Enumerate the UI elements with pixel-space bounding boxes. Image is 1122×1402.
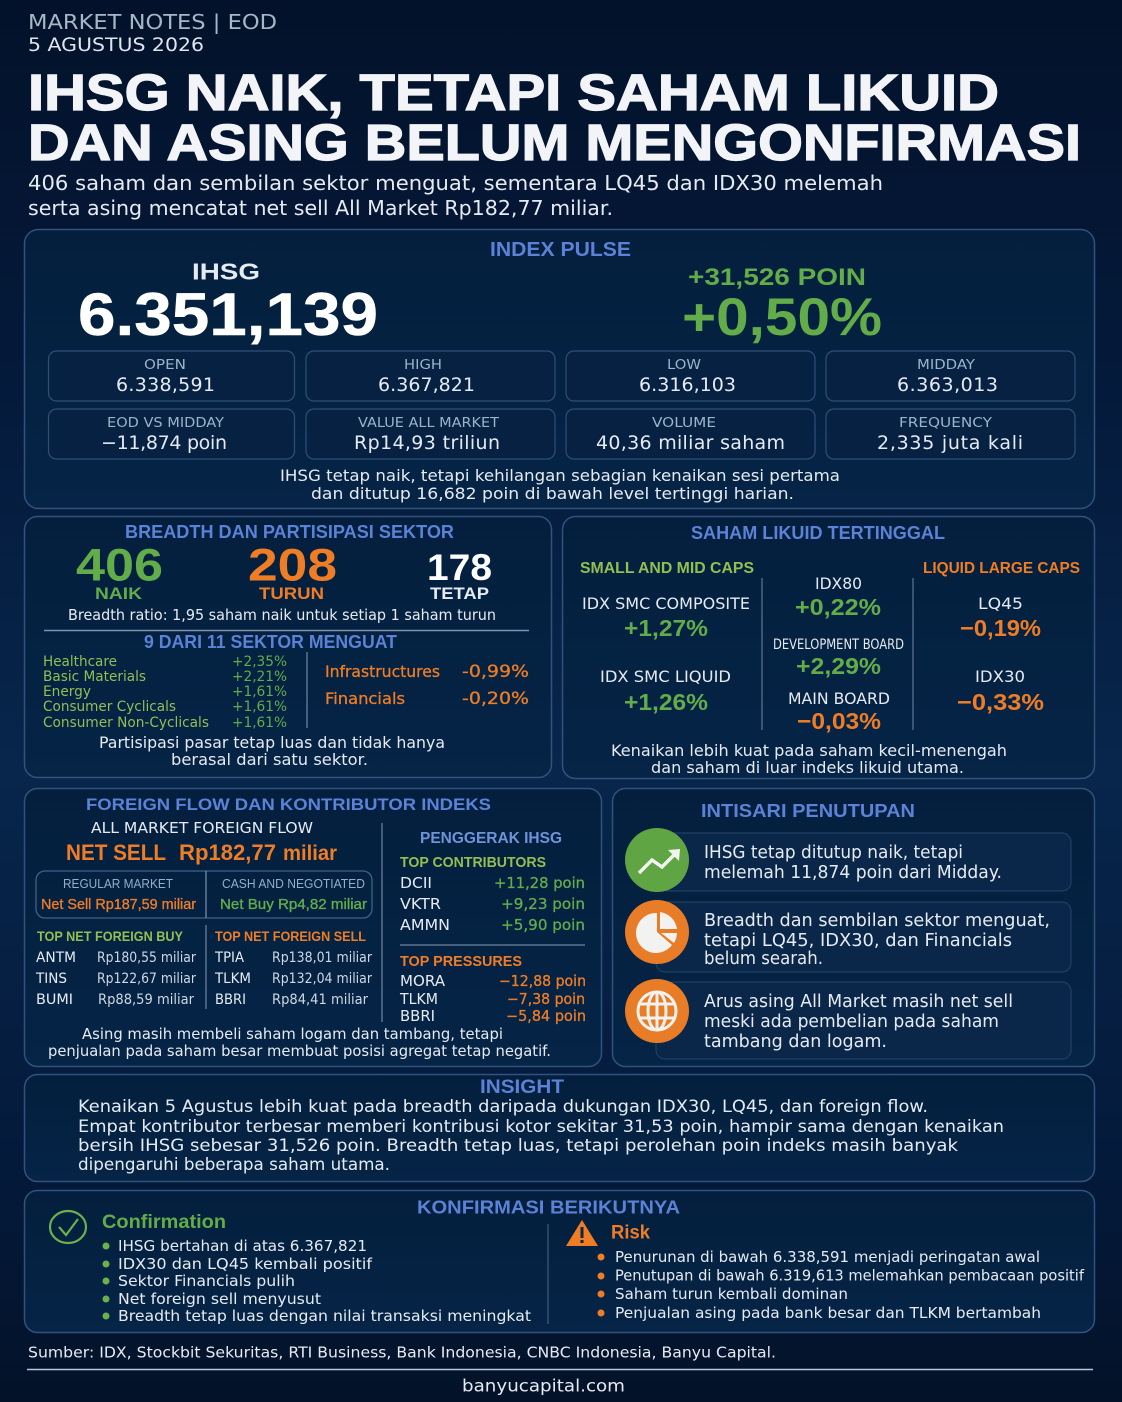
heading: breadth: BREADTH DAN PARTISIPASI SEKTOR: [125, 522, 454, 542]
panel: insight: [24, 1074, 1094, 1182]
table: top net foreign sell: [214, 928, 372, 1008]
stat: tetap: [427, 547, 492, 603]
table: top contributors: AMMN: [400, 916, 450, 934]
panel: foreign flow: [24, 788, 602, 1066]
stat: midday: MIDDAY: [917, 357, 976, 373]
column: broader boards: [773, 574, 904, 734]
risk list: Saham turun kembali dominan: [615, 1285, 848, 1303]
panel: index pulse: [24, 230, 1094, 508]
all market foreign flow: ALL MARKET FOREIGN FLOW: [91, 819, 313, 837]
column: liquid large caps: IDX30: [975, 667, 1025, 686]
market split box: CASH AND NEGOTIATED: [222, 876, 365, 891]
note: foreign flow: Asing masih membeli saham logam dan tambang, tetapi: [82, 1025, 503, 1043]
list: rising sectors: Consumer Non-Cyclicals: [43, 715, 209, 731]
panel: konfirmasi berikutnya: [24, 1190, 1094, 1332]
stat: frequency: FREQUENCY: [899, 415, 993, 431]
table: top pressures: −12,88 poin: [499, 972, 586, 990]
table: top contributors: [400, 854, 585, 934]
takeaway 1: IHSG tetap ditutup naik, tetapi: [704, 842, 963, 863]
title: IHSG NAIK, TETAPI SAHAM LIKUID: [28, 64, 999, 121]
note: index pulse: [280, 466, 840, 503]
stat: turun: 208: [248, 540, 337, 590]
IHSG change: +0,50%: [682, 288, 882, 347]
list: rising sectors: Consumer Cyclicals: [43, 699, 176, 715]
header: market notes label: MARKET NOTES | EOD: [28, 10, 277, 34]
table: top pressures: BBRI: [400, 1007, 435, 1025]
table: top net foreign buy: TOP NET FOREIGN BUY: [37, 928, 184, 944]
list: falling sectors: [325, 662, 529, 709]
table: top net foreign buy: [35, 928, 196, 1008]
heading: sektor: 9 DARI 11 SEKTOR MENGUAT: [144, 632, 397, 652]
all market foreign flow: NET SELL: [66, 840, 166, 865]
takeaway 1: [625, 828, 1071, 892]
column: liquid large caps: LQ45: [978, 594, 1023, 613]
stat: tetap: 178: [427, 547, 492, 588]
column: liquid large caps: LIQUID LARGE CAPS: [923, 560, 1080, 577]
stat: tetap: TETAP: [430, 584, 489, 603]
risk list: Risk: [611, 1222, 650, 1244]
stat: eod vs midday: −11,874 poin: [101, 432, 227, 454]
heading: insight: INSIGHT: [480, 1077, 564, 1098]
list: rising sectors: +1,61%: [232, 684, 287, 700]
confirmation list: Net foreign sell menyusut: [118, 1290, 321, 1308]
table: top net foreign sell: TOP NET FOREIGN SELL: [215, 928, 366, 944]
column: broader boards: −0,03%: [797, 708, 881, 734]
table: top pressures: TOP PRESSURES: [400, 953, 522, 970]
column: small and mid caps: SMALL AND MID CAPS: [580, 560, 754, 577]
icon: trend arrow: [625, 828, 689, 892]
subtitle: 406 saham dan sembilan sektor menguat, sementara LQ45 dan IDX30 melemah: [28, 171, 883, 195]
note: breadth: Partisipasi pasar tetap luas dan tidak hanya: [99, 733, 445, 752]
list: falling sectors: Infrastructures: [325, 662, 440, 681]
stat: volume: VOLUME: [652, 415, 716, 431]
risk list: Penutupan di bawah 6.319,613 melemahkan pembacaan positif: [615, 1266, 1085, 1284]
table: top net foreign sell: Rp132,04 miliar: [272, 971, 372, 987]
heading: penggerak ihsg: PENGGERAK IHSG: [420, 830, 562, 847]
table: top net foreign buy: Rp180,55 miliar: [97, 950, 196, 966]
stat: midday: 6.363,013: [897, 374, 998, 396]
risk list: Penurunan di bawah 6.338,591 menjadi peringatan awal: [615, 1248, 1040, 1266]
note: saham likuid: dan saham di luar indeks likuid utama.: [651, 758, 964, 777]
IHSG level: IHSG: [192, 258, 260, 284]
note: breadth: [99, 733, 445, 769]
list: falling sectors: -0,20%: [462, 689, 529, 709]
insight text: Empat kontributor terbesar memberi kontribusi kotor sekitar 31,53 poin, hampir sama dengan kenaikan: [78, 1117, 1004, 1137]
column: broader boards: DEVELOPMENT BOARD: [773, 637, 904, 653]
note: saham likuid: [611, 741, 1007, 777]
stat: open: OPEN: [144, 357, 186, 373]
column: small and mid caps: +1,26%: [624, 689, 708, 715]
list: falling sectors: Financials: [325, 689, 405, 708]
note: index pulse: IHSG tetap naik, tetapi kehilangan sebagian kenaikan sesi pertama: [280, 466, 840, 485]
stat: low: [566, 351, 815, 401]
column: broader boards: +0,22%: [795, 594, 881, 620]
list: rising sectors: +2,35%: [232, 654, 287, 670]
heading: saham likuid: SAHAM LIKUID TERTINGGAL: [691, 523, 945, 543]
column: liquid large caps: −0,33%: [957, 689, 1044, 715]
takeaway 3: meski ada pembelian pada saham: [704, 1011, 999, 1032]
stat: naik: 406: [76, 540, 163, 590]
takeaway 2: [625, 900, 1071, 972]
panel: breadth: [24, 516, 552, 778]
takeaway 1: melemah 11,874 poin dari Midday.: [704, 862, 1002, 883]
insight text: Kenaikan 5 Agustus lebih kuat pada breadth daripada dukungan IDX30, LQ45, dan foreign flow.: [78, 1097, 928, 1117]
column: small and mid caps: IDX SMC COMPOSITE: [582, 594, 750, 613]
stat: volume: [566, 409, 815, 459]
subtitle: [28, 171, 883, 220]
list: rising sectors: +1,61%: [232, 699, 287, 715]
all market foreign flow: Rp182,77: [179, 840, 276, 865]
note: breadth: berasal dari satu sektor.: [171, 750, 368, 769]
table: top net foreign buy: Rp88,59 miliar: [98, 992, 194, 1008]
stat: value all market: Rp14,93 triliun: [354, 432, 500, 454]
market split box: Net Sell Rp187,59 miliar: [41, 896, 196, 913]
stat: low: LOW: [667, 357, 701, 373]
column: small and mid caps: [580, 560, 754, 715]
header: market notes label: 5 AGUSTUS 2026: [28, 34, 204, 56]
list: rising sectors: +1,61%: [232, 715, 287, 731]
market split box: Net Buy Rp4,82 miliar: [220, 896, 367, 913]
list: rising sectors: Energy: [43, 684, 91, 700]
table: top net foreign sell: Rp138,01 miliar: [272, 950, 372, 966]
takeaway 2: Breadth dan sembilan sektor menguat,: [704, 910, 1050, 931]
stat: frequency: [826, 409, 1075, 459]
source line: Sumber: IDX, Stockbit Sekuritas, RTI Business, Bank Indonesia, CNBC Indonesia, Banyu Capital.: [28, 1344, 776, 1362]
heading: intisari: INTISARI PENUTUPAN: [701, 801, 915, 821]
market split box: REGULAR MARKET: [63, 876, 173, 891]
list: rising sectors: Healthcare: [43, 654, 117, 670]
insight text: [78, 1097, 1004, 1175]
stat: naik: NAIK: [95, 584, 143, 603]
table: top net foreign sell: Rp84,41 miliar: [272, 992, 368, 1008]
table: top pressures: TLKM: [399, 990, 438, 1008]
table: top contributors: VKTR: [400, 895, 441, 913]
heading: foreign flow: FOREIGN FLOW DAN KONTRIBUTOR INDEKS: [86, 795, 491, 814]
panel: intisari penutupan: [612, 788, 1094, 1066]
list: rising sectors: [43, 654, 287, 731]
confirmation list: [102, 1212, 531, 1325]
stat: volume: 40,36 miliar saham: [596, 432, 785, 454]
confirmation list: Confirmation: [102, 1212, 226, 1233]
table: top net foreign buy: BUMI: [36, 992, 73, 1008]
table: top pressures: [399, 953, 586, 1025]
note: saham likuid: Kenaikan lebih kuat pada saham kecil-menengah: [611, 741, 1007, 760]
note: foreign flow: penjualan pada saham besar membuat posisi agregat tetap negatif.: [48, 1042, 551, 1060]
table: top net foreign sell: BBRI: [215, 992, 246, 1008]
icon: pie chart: [625, 900, 689, 964]
table: top net foreign buy: ANTM: [36, 950, 76, 966]
table: top contributors: +9,23 poin: [501, 895, 585, 913]
takeaway 3: Arus asing All Market masih net sell: [704, 991, 1013, 1012]
column: small and mid caps: IDX SMC LIQUID: [600, 667, 731, 686]
stat: eod vs midday: [48, 409, 294, 459]
stat: high: [306, 351, 555, 401]
IHSG level: 6.351,139: [78, 281, 378, 348]
IHSG level: [78, 258, 378, 348]
stat: eod vs midday: EOD VS MIDDAY: [107, 415, 225, 431]
insight text: dipengaruhi beberapa saham utama.: [78, 1155, 390, 1175]
table: top contributors: +11,28 poin: [494, 874, 585, 892]
stat: turun: [248, 540, 337, 603]
icon: check circle: [50, 1211, 86, 1243]
title: DAN ASING BELUM MENGONFIRMASI: [28, 114, 1081, 171]
column: broader boards: IDX80: [815, 574, 862, 593]
confirmation list: Breadth tetap luas dengan nilai transaksi meningkat: [118, 1307, 531, 1325]
confirmation list: Sektor Financials pulih: [118, 1272, 295, 1290]
note: index pulse: dan ditutup 16,682 poin di bawah level tertinggi harian.: [311, 484, 794, 503]
column: small and mid caps: +1,27%: [624, 615, 708, 641]
stat: value all market: VALUE ALL MARKET: [358, 415, 500, 431]
table: top net foreign buy: TINS: [35, 971, 67, 987]
breadth ratio: Breadth ratio: 1,95 saham naik untuk setiap 1 saham turun: [68, 606, 496, 624]
risk list: [598, 1222, 1085, 1322]
takeaway 2: tetapi LQ45, IDX30, dan Financials: [704, 930, 1012, 951]
panel: saham likuid: [562, 516, 1094, 778]
heading: konfirmasi: KONFIRMASI BERIKUTNYA: [417, 1198, 680, 1218]
stat: value all market: [306, 409, 555, 459]
takeaway 2: belum searah.: [704, 948, 823, 969]
table: top net foreign buy: Rp122,67 miliar: [97, 971, 196, 987]
subtitle: serta asing mencatat net sell All Market Rp182,77 miliar.: [28, 196, 613, 220]
table: top pressures: MORA: [400, 972, 446, 990]
IHSG change: [682, 264, 882, 347]
takeaway 3: [625, 979, 1071, 1059]
stat: high: 6.367,821: [378, 374, 475, 396]
table: top pressures: −7,38 poin: [507, 990, 585, 1008]
column: broader boards: MAIN BOARD: [788, 689, 890, 708]
stat: open: [48, 351, 294, 401]
note: foreign flow: [48, 1025, 551, 1060]
table: top net foreign sell: TLKM: [214, 971, 251, 987]
insight text: bersih IHSG sebesar 31,526 poin. Breadth tetap luas, tetapi perolehan poin indeks masih banyak: [78, 1136, 958, 1156]
table: top net foreign sell: TPIA: [214, 950, 244, 966]
list: rising sectors: +2,21%: [232, 669, 287, 685]
stat: high: HIGH: [404, 357, 442, 373]
table: top contributors: +5,90 poin: [501, 916, 585, 934]
title: [28, 64, 1081, 171]
all market foreign flow: miliar: [283, 842, 337, 865]
column: broader boards: +2,29%: [796, 653, 881, 679]
column: liquid large caps: [923, 560, 1080, 715]
table: top pressures: −5,84 poin: [506, 1007, 586, 1025]
list: rising sectors: Basic Materials: [43, 669, 146, 685]
header: market notes label: [28, 10, 277, 56]
stat: frequency: 2,335 juta kali: [877, 432, 1023, 454]
icon: warning: [566, 1220, 598, 1246]
stat: naik: [76, 540, 163, 603]
table: top contributors: DCII: [400, 874, 432, 892]
confirmation list: IDX30 dan LQ45 kembali positif: [118, 1255, 373, 1273]
IHSG change: +31,526 POIN: [688, 264, 866, 291]
heading: index pulse: INDEX PULSE: [490, 239, 631, 261]
icon: globe: [625, 979, 689, 1043]
column: liquid large caps: −0,19%: [960, 615, 1041, 641]
takeaway 3: tambang dan logam.: [704, 1031, 887, 1052]
market split box: [36, 871, 372, 918]
risk list: Penjualan asing pada bank besar dan TLKM bertambah: [615, 1304, 1041, 1322]
confirmation list: IHSG bertahan di atas 6.367,821: [118, 1237, 367, 1255]
table: top contributors: TOP CONTRIBUTORS: [400, 854, 546, 871]
stat: low: 6.316,103: [639, 374, 736, 396]
all market foreign flow: [66, 819, 337, 865]
list: falling sectors: -0,99%: [462, 662, 529, 682]
stat: turun: TURUN: [259, 584, 324, 603]
stat: open: 6.338,591: [116, 374, 215, 396]
footer url: banyucapital.com: [462, 1376, 625, 1396]
stat: midday: [826, 351, 1075, 401]
